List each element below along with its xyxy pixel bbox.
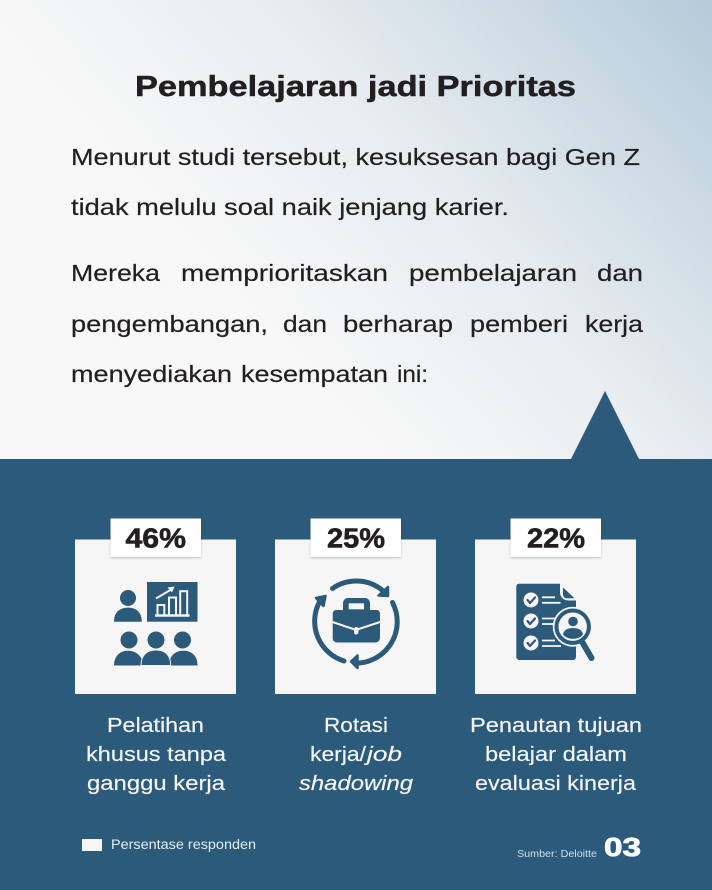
card 2: job rotation (275, 518, 436, 795)
icon: presenter and audience with chart (114, 582, 198, 666)
card 3 background (475, 540, 636, 694)
second paragraph (71, 260, 643, 387)
card 2 label (299, 715, 413, 795)
intro paragraph (71, 144, 640, 220)
second paragraph: memprioritaskan (181, 260, 388, 286)
card 1 percentage badge: 46% (126, 522, 186, 554)
second paragraph: pengembangan, (71, 311, 268, 337)
card 1 label: ganggu kerja (87, 773, 226, 795)
card 3 percentage badge (510, 518, 601, 557)
card 1: training (75, 518, 236, 795)
intro paragraph: Menurut studi tersebut, kesuksesan bagi Gen Z (71, 144, 640, 170)
legend: Persentase responden (111, 837, 256, 852)
second paragraph: menyediakan (71, 361, 232, 387)
background gradient (0, 0, 712, 459)
card 2 percentage badge: 25% (327, 522, 385, 554)
card 2 percentage badge (310, 518, 401, 557)
card 1 label (86, 715, 227, 795)
card 2 label: shadowing (299, 773, 413, 795)
icon: briefcase in rotating arrows (315, 581, 397, 668)
card 3 label: belajar dalam (485, 744, 627, 766)
second paragraph: Mereka (71, 260, 160, 286)
page number: 03 (604, 832, 641, 862)
second paragraph: pembelajaran (409, 260, 577, 286)
card 3 label: evaluasi kinerja (475, 773, 637, 795)
card 2 label: Rotasi (324, 715, 388, 737)
card 3 percentage badge: 22% (527, 522, 585, 554)
card 1 percentage badge (110, 518, 201, 557)
blue lower panel with pointer (0, 391, 712, 890)
intro paragraph: tidak melulu soal naik jenjang karier. (71, 194, 509, 220)
icon: checklist and magnifier (516, 584, 593, 660)
card 2 label: kerja/ (310, 744, 367, 766)
second paragraph: pemberi (470, 311, 568, 337)
title: Pembelajaran jadi Prioritas (135, 71, 576, 103)
card 2 background (275, 540, 436, 694)
second paragraph: berharap (343, 311, 453, 337)
source note: Sumber: Deloitte (517, 848, 597, 860)
second paragraph: kerja (585, 311, 643, 337)
card 3 label (470, 715, 642, 795)
second paragraph: ini: (397, 361, 428, 387)
card 1 label: khusus tanpa (86, 744, 227, 766)
card 2 label: job (363, 744, 402, 766)
card 3 label: Penautan tujuan (470, 715, 642, 737)
card 1 label: Pelatihan (107, 715, 204, 737)
second paragraph: dan (597, 260, 643, 286)
card 1 background (75, 540, 236, 694)
second paragraph: kesempatan (241, 361, 388, 387)
card 3: goals in performance review (470, 518, 642, 795)
second paragraph: dan (283, 311, 327, 337)
